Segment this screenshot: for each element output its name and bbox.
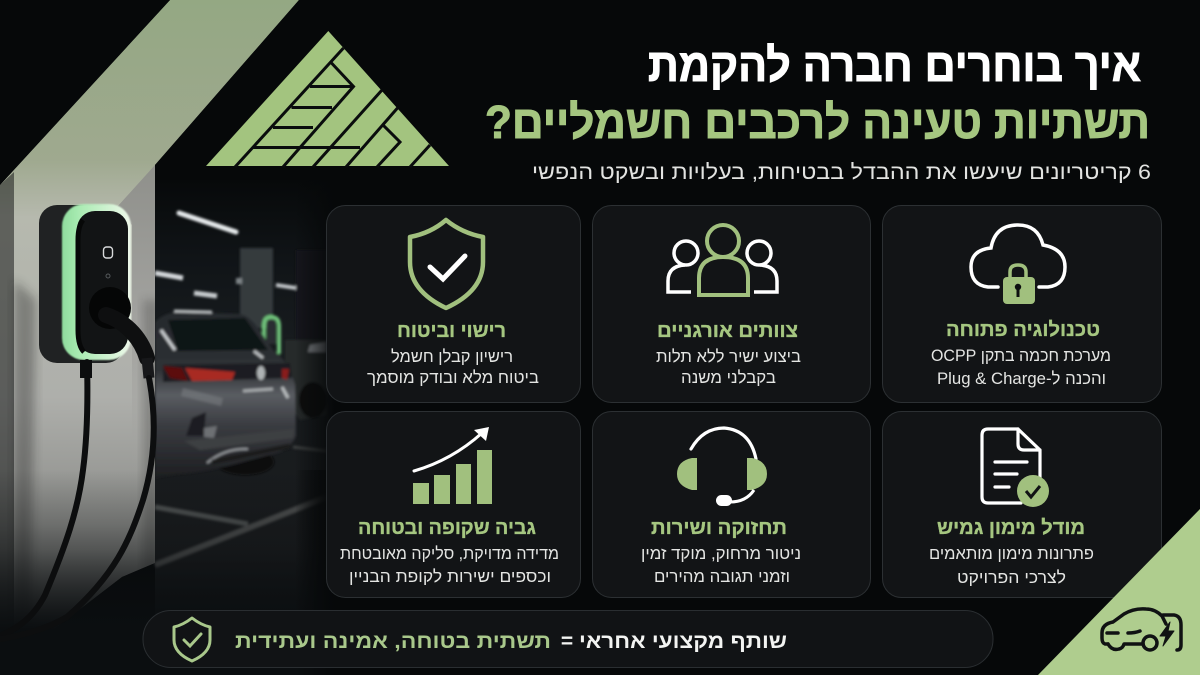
icon: cloud with padlock: [971, 225, 1065, 304]
card body: בקבלני משנה: [681, 368, 776, 387]
card heading: רישוי וביטוח: [397, 320, 506, 342]
card body: לצרכי הפרויקט: [957, 568, 1066, 587]
icon: small shield check: [174, 618, 210, 661]
callout text: =: [561, 630, 573, 653]
card heading: גביה שקופה ובטוחה: [358, 517, 536, 539]
panel: open technology: [882, 206, 1162, 402]
card body: פתרונות מימון מותאמים: [929, 544, 1094, 563]
card body: מדידה מדויקת, סליקה מאובטחת: [340, 544, 559, 563]
card heading: תחזוקה ושירות: [651, 517, 787, 539]
icon: document with check: [982, 429, 1049, 507]
card body: [656, 347, 801, 387]
logo: triangular roof mark: [206, 31, 449, 167]
card body: ביצוע ישיר ללא תלות: [656, 347, 801, 366]
title: [485, 39, 1150, 148]
panel: maintenance and service: [592, 412, 870, 598]
card body: [929, 544, 1094, 587]
title: תשתיות טעינה לרכבים חשמליים?: [485, 96, 1150, 148]
card body: [931, 346, 1111, 388]
icon: electric car: [1102, 609, 1181, 650]
callout text: שותף מקצועי אחראי: [579, 630, 787, 653]
floor fade over the pillar base: [0, 470, 335, 675]
card heading: מודל מימון גמיש: [937, 517, 1085, 539]
icon: three people: [668, 225, 777, 295]
charger cables: [0, 315, 154, 640]
card body: [641, 544, 801, 586]
title: איך בוחרים חברה להקמת: [648, 39, 1141, 91]
card heading: טכנולוגיה פתוחה: [946, 319, 1100, 341]
card body: וכספים ישירות לקופת הבניין: [349, 567, 551, 586]
concrete pillar with diagonal green band: [0, 0, 299, 640]
card body: רישיון קבלן חשמל: [391, 347, 513, 366]
bottom callout bar: [143, 610, 993, 668]
callout text: תשתית בטוחה, אמינה ועתידית: [235, 630, 551, 653]
panel: flexible financing: [882, 412, 1162, 598]
photo: underground garage with parked car: [155, 180, 335, 675]
icon: rising bar chart with arrow: [413, 427, 492, 504]
corner triangle with EV icon: [1038, 509, 1200, 675]
panel: licensing and insurance: [326, 206, 580, 402]
card body: ניטור מרחוק, מוקד זמין: [641, 544, 801, 563]
card body: ביטוח מלא ובודק מוסמך: [367, 368, 539, 387]
card body: מערכת חכמה בתקן OCPP: [931, 346, 1111, 365]
card body: [340, 544, 559, 586]
card body: [367, 347, 539, 387]
card body: וזמני תגובה מהירים: [654, 567, 790, 586]
callout text: [235, 630, 787, 653]
EV wall charger: [39, 204, 131, 363]
card body: והכנה ל-Plug & Charge: [937, 369, 1106, 388]
icon: headset: [677, 428, 767, 506]
icon: shield check: [410, 220, 483, 308]
panel: in-house teams: [592, 206, 870, 402]
card heading: צוותים אורגניים: [657, 320, 798, 342]
panel: transparent billing: [326, 412, 580, 598]
subtitle: 6 קריטריונים שיעשו את ההבדל בבטיחות, בעלויות ובשקט הנפשי: [532, 161, 1151, 184]
